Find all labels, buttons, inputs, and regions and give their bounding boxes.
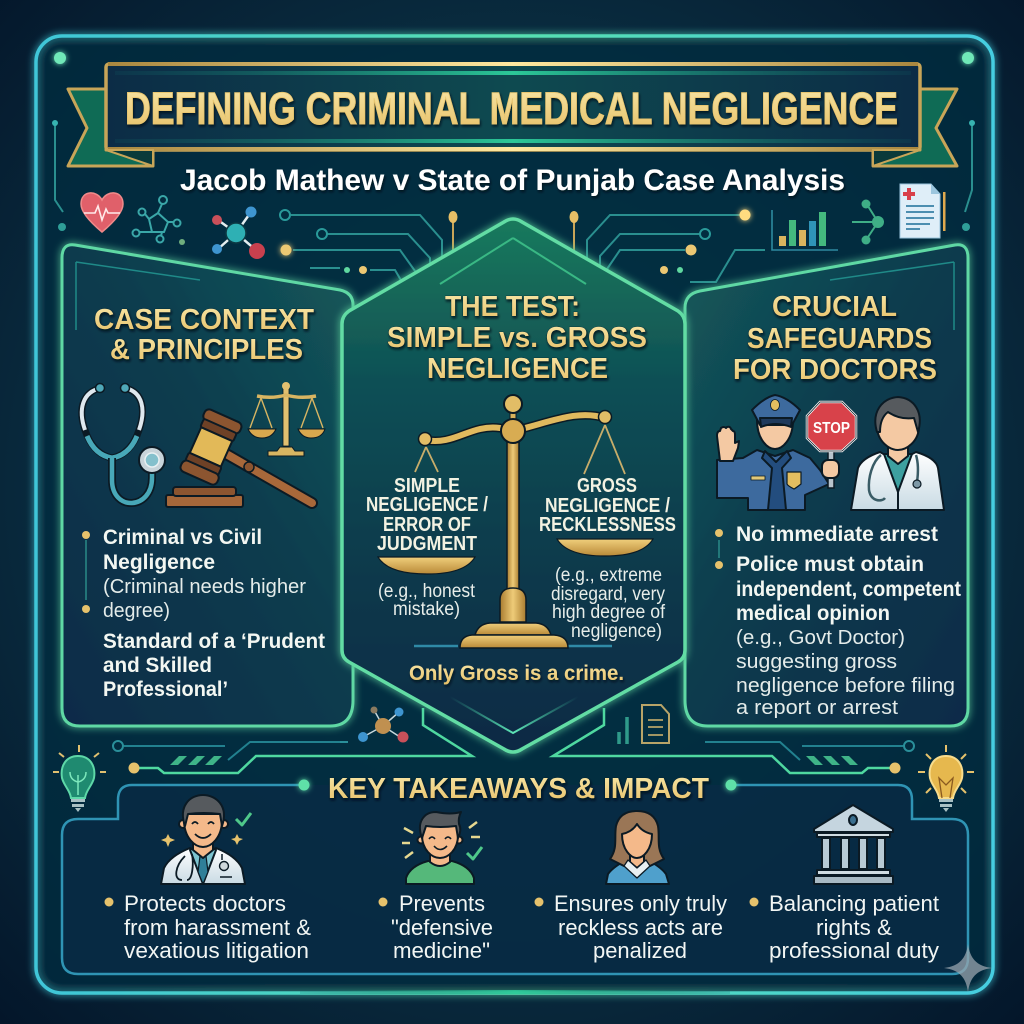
bullet list: Negligence [103, 551, 215, 574]
takeaway 2: Prevents [399, 891, 485, 916]
bullet list: Police must obtain [736, 553, 924, 576]
heading: & PRINCIPLES [110, 334, 303, 366]
icon: molecule [212, 206, 265, 259]
panel: case context and principles [62, 245, 353, 726]
icon: yellow light bulb [918, 745, 974, 812]
left pan labels: ERROR OF [383, 514, 471, 536]
bullet list: No immediate arrest [736, 523, 938, 546]
icon: network outline [132, 196, 185, 245]
heading: SAFEGUARDS [747, 323, 932, 355]
icon: doctor [851, 397, 944, 510]
icon: stop sign: STOP [813, 420, 850, 437]
takeaway 3: penalized [593, 938, 687, 963]
heading: NEGLIGENCE [427, 353, 608, 385]
lower connectors and small icons [113, 705, 914, 774]
icon: small bars and document [619, 705, 669, 744]
bullet list [82, 526, 325, 701]
heading [94, 304, 314, 366]
right pan labels: NEGLIGENCE / [545, 495, 670, 517]
right pan labels: high degree of [552, 602, 666, 623]
right pan labels: (e.g., extreme [555, 565, 662, 586]
takeaway 2: "defensive [391, 915, 493, 940]
icon: small molecule [358, 706, 408, 742]
right pan labels: RECKLESSNESS [539, 514, 676, 536]
panel: key takeaways [62, 773, 968, 974]
icon: police officer [717, 395, 829, 510]
icon: relieved person [402, 812, 482, 884]
icon: heart with ECG [81, 193, 123, 232]
conclusion: Only Gross is a crime. [409, 662, 624, 685]
left pan labels: NEGLIGENCE / [366, 494, 488, 516]
icon: medical document [900, 184, 946, 238]
bullet list: Professional’ [103, 678, 228, 701]
heading [387, 291, 647, 385]
bullet list: negligence before filing [736, 675, 955, 697]
circuit traces top [280, 210, 765, 285]
right ribbon tail [873, 89, 957, 166]
icon: gavel [166, 408, 312, 507]
takeaway 2: medicine" [393, 938, 490, 963]
icon: share nodes [852, 200, 884, 244]
right pan labels: negligence) [571, 621, 662, 642]
bullet list: medical opinion [736, 602, 890, 625]
takeaway 3 [534, 891, 727, 963]
heading [733, 291, 937, 386]
bullet list: and Skilled [103, 654, 212, 677]
icon: happy doctor [161, 795, 251, 884]
left pan labels: mistake) [393, 599, 460, 620]
takeaway 4: Balancing patient [769, 891, 939, 916]
banner plate [106, 64, 920, 150]
icon: corner sparkle [944, 944, 992, 992]
heading: CRUCIAL [772, 291, 897, 323]
left pan labels: (e.g., honest [378, 581, 476, 602]
icon: woman [606, 811, 669, 884]
right pan labels: GROSS [577, 475, 637, 497]
heading: THE TEST: [445, 291, 580, 323]
icon: courthouse [814, 805, 893, 884]
takeaway 1: vexatious litigation [124, 938, 309, 963]
right pan labels: disregard, very [551, 584, 665, 605]
bullet list: suggesting gross [736, 651, 897, 673]
left pan labels [366, 475, 488, 620]
left pan labels: JUDGMENT [377, 533, 477, 555]
bullet list: a report or arrest [736, 697, 898, 719]
takeaway 3: Ensures only truly [554, 891, 727, 916]
icon: stethoscope [82, 384, 165, 503]
heading: KEY TAKEAWAYS & IMPACT [328, 773, 709, 805]
bullet list: Criminal vs Civil [103, 526, 262, 549]
takeaway 4: professional duty [769, 938, 939, 963]
left pan labels: SIMPLE [394, 475, 460, 497]
heading: SIMPLE vs. GROSS [387, 322, 647, 354]
panel: crucial safeguards [685, 245, 968, 726]
takeaway 1 [104, 891, 311, 963]
bullet list: (e.g., Govt Doctor) [736, 627, 905, 649]
bullet list [715, 523, 961, 719]
title banner [68, 62, 957, 166]
heading: FOR DOCTORS [733, 354, 937, 386]
bullet list: independent, competent [736, 578, 961, 601]
scale illustration [378, 395, 653, 648]
bullet list: degree) [103, 600, 170, 622]
icon: stop sign [807, 402, 856, 488]
takeaway 4: rights & [816, 915, 892, 940]
takeaway 1: Protects doctors [124, 891, 286, 916]
takeaway 4 [750, 891, 939, 963]
bottom frame highlight [300, 990, 730, 994]
takeaway 1: from harassment & [124, 915, 311, 940]
subtitle: Jacob Mathew v State of Punjab Case Analysis [180, 164, 845, 197]
left ribbon tail [68, 89, 153, 166]
icon: bar chart [772, 210, 838, 250]
right pan labels [539, 475, 676, 642]
heading: CASE CONTEXT [94, 304, 314, 336]
takeaway 3: reckless acts are [558, 915, 723, 940]
icon: green light bulb [53, 745, 106, 812]
bullet list: (Criminal needs higher [103, 576, 306, 598]
bullet list: Standard of a ‘Prudent [103, 630, 325, 653]
panel: the test hexagon [342, 219, 685, 752]
takeaway 2 [378, 891, 493, 963]
icon: small scale [248, 382, 325, 456]
